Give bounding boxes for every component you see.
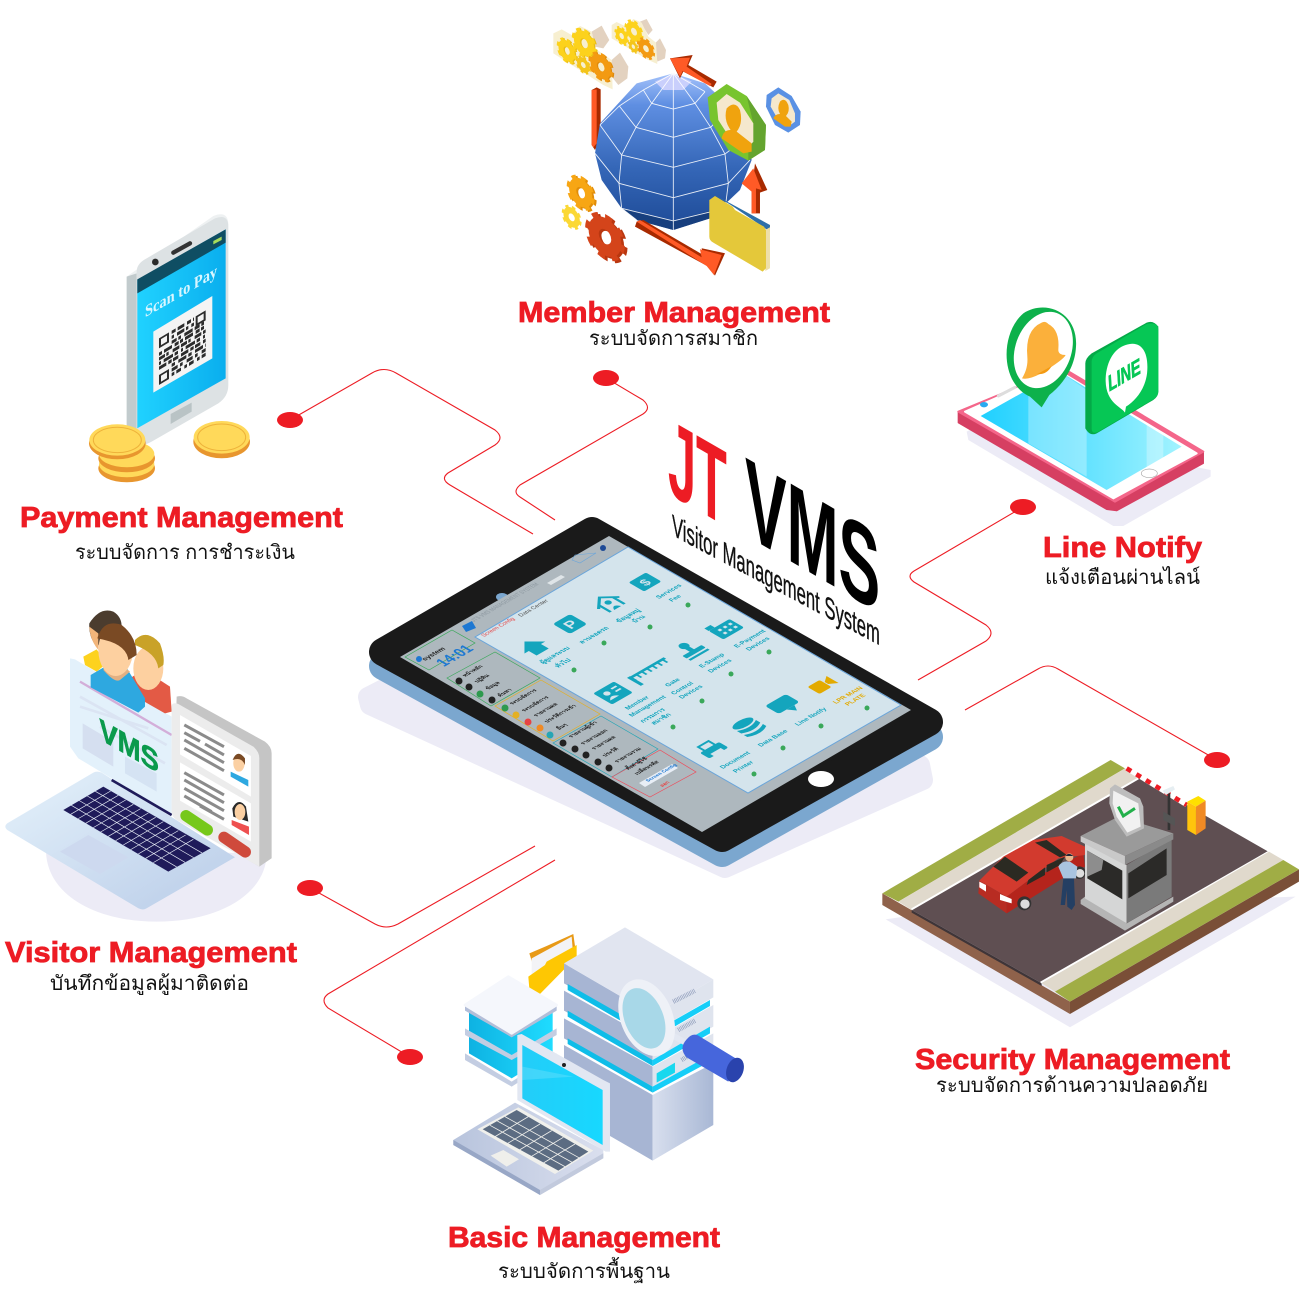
gear cloud left <box>553 25 628 89</box>
laptop <box>453 1034 610 1195</box>
dashboard labels: กรรมการ <box>639 707 668 724</box>
laptop base <box>5 772 235 909</box>
gear cloud right <box>612 17 666 64</box>
address bar: Screen Config <box>481 617 517 638</box>
heading: Payment Management <box>20 502 343 534</box>
parking icon: P <box>560 618 583 632</box>
touchpad <box>60 835 128 874</box>
light beams <box>1028 372 1163 477</box>
folder <box>709 195 770 272</box>
sand bottom <box>1042 852 1283 992</box>
address bar: JTS VMS MANAGEMENT SYSTEM <box>470 582 541 623</box>
sidebar text: ประวัติการเข้า <box>542 703 578 724</box>
icon: member management globe <box>553 17 801 276</box>
member badge small <box>766 87 801 133</box>
screen <box>400 536 911 832</box>
connector: payment <box>277 370 533 534</box>
label: visitor management <box>5 937 297 996</box>
connector: security <box>965 666 1230 768</box>
stamp icon <box>671 638 710 661</box>
heading: Line Notify <box>1043 532 1202 564</box>
phone top <box>958 368 1203 502</box>
tagline: Visitor Management System <box>672 509 880 652</box>
text lines <box>184 725 224 819</box>
green button <box>186 816 207 830</box>
shadow <box>46 850 267 922</box>
profile card <box>172 696 272 867</box>
dashboard labels: Data Base <box>757 729 790 748</box>
logo VMS: VMS <box>745 433 880 637</box>
phone screen <box>137 229 226 428</box>
subtitle: แจ้งเตือนผ่านไลน์ <box>1045 566 1200 589</box>
coin single <box>193 421 250 458</box>
tablet edge <box>383 545 929 853</box>
home icon <box>514 636 553 658</box>
main panel <box>475 547 901 793</box>
heading: Security Management <box>915 1044 1230 1076</box>
avatar man <box>231 754 248 787</box>
screen <box>981 372 1182 490</box>
front camera <box>980 402 988 407</box>
dashboard labels: Document <box>719 750 753 770</box>
dashboard labels: Member <box>624 695 652 711</box>
dashboard labels: Devices <box>745 636 772 652</box>
dashboard labels: E-Stamp <box>698 652 727 669</box>
sidebar text: รายงานผล <box>532 702 560 718</box>
label: line notify <box>1043 532 1202 589</box>
security guard <box>1058 853 1077 910</box>
battery <box>213 237 222 244</box>
dashboard labels: Management <box>628 694 669 718</box>
car <box>978 836 1086 913</box>
sidebar text: ระบบจัดการ <box>520 695 551 713</box>
dashboard labels: Devices <box>707 658 734 674</box>
dashboard labels: PLATE <box>844 693 868 707</box>
sidebar text: ค้นหา <box>495 687 514 698</box>
parking icon <box>553 614 587 634</box>
user icon <box>416 656 422 662</box>
heading: Basic Management <box>448 1222 720 1254</box>
terminal icon <box>704 616 744 640</box>
clock: 14:01 <box>433 643 478 669</box>
camera <box>152 259 159 265</box>
label: payment management <box>20 502 343 564</box>
barrier post <box>1187 796 1206 835</box>
logo: JT VMS <box>668 395 880 652</box>
sidebar text: อื่นๆ <box>553 722 569 731</box>
tablet shadow <box>368 678 923 868</box>
coin stack <box>89 424 155 482</box>
heading: Visitor Management <box>5 937 297 969</box>
connector: line notify <box>910 499 1036 680</box>
dashboard labels: Fee <box>668 594 684 603</box>
connector: basic <box>324 860 555 1065</box>
magnifier <box>608 971 747 1085</box>
dashboard labels: Services <box>655 583 684 600</box>
gate icon <box>628 657 677 685</box>
grass top <box>882 760 1125 902</box>
sidebar text: Screen Config <box>645 763 679 783</box>
shield <box>1109 784 1144 837</box>
dashboard labels: สมาชิก <box>649 712 673 726</box>
chat icon <box>765 694 806 718</box>
connector: member <box>516 370 648 520</box>
bottom gears <box>563 172 625 267</box>
qr code <box>153 296 212 393</box>
subtitle: ระบบจัดการพื้นฐาน <box>498 1257 670 1283</box>
icon: security gate <box>882 760 1299 1027</box>
camera pole <box>1163 786 1175 830</box>
dashboard labels: ข้อมูลหมู่ <box>613 607 643 625</box>
subtitle: ระบบจัดการสมาชิก <box>589 328 758 350</box>
printer icon <box>694 738 731 760</box>
globe body <box>595 73 752 230</box>
dashboard labels: บ้าน <box>629 613 648 624</box>
bell bubble <box>1004 303 1083 407</box>
icon: visitor management laptop <box>5 611 272 922</box>
dashboard labels: ลานจอดรถ <box>578 626 611 645</box>
grass bottom <box>1055 860 1299 1002</box>
dashboard labels: Control <box>670 681 696 696</box>
sidebar text: รายงานผู้เข้า <box>566 720 600 740</box>
panel top <box>180 715 251 797</box>
avatar woman <box>232 802 249 835</box>
laptop screen <box>70 658 172 817</box>
road lines <box>912 778 1269 983</box>
keyboard <box>63 787 211 872</box>
sidebar text: รายงานรวม <box>613 746 644 764</box>
label: member management <box>518 297 830 350</box>
line badge: LINE <box>1106 354 1143 396</box>
dashboard labels: Printer <box>732 760 756 774</box>
icon: payment phone <box>89 214 250 482</box>
small server <box>465 977 557 1087</box>
member icon <box>593 682 633 704</box>
sidebar text: ประวัติ <box>600 746 621 758</box>
speaker <box>173 243 190 253</box>
dashboard labels: Gate <box>664 677 683 688</box>
red button <box>224 837 245 852</box>
home button <box>171 403 192 424</box>
icon: line notify phone <box>958 303 1211 526</box>
config pill <box>639 764 678 787</box>
guard booth <box>1081 817 1173 931</box>
bezel <box>965 371 1197 498</box>
logo JT: JT <box>668 395 727 550</box>
dashboard labels: ทั่วไป <box>551 656 573 669</box>
dashboard labels: Devices <box>678 684 705 700</box>
house person icon <box>589 592 628 614</box>
phone shadow <box>967 423 1211 526</box>
globe bottom band <box>622 207 725 230</box>
icon: basic management servers <box>453 927 747 1195</box>
hinge <box>112 780 172 815</box>
dashboard labels <box>537 583 870 776</box>
phone side <box>958 368 1203 511</box>
left arrow bar <box>592 87 601 150</box>
globe grid <box>595 73 750 230</box>
label: basic management <box>448 1222 720 1283</box>
subtitle: ระบบจัดการ การชำระเงิน <box>75 542 295 564</box>
sidebar text: ออก <box>659 780 672 788</box>
folder <box>528 934 577 997</box>
speaker <box>998 387 1015 396</box>
line badge <box>1085 322 1158 434</box>
label: security management <box>915 1044 1230 1097</box>
shadow <box>886 897 1296 1027</box>
subtitle: บันทึกข้อมูลผู้มาติดต่อ <box>50 973 249 996</box>
home button <box>1141 469 1157 478</box>
dashboard labels: E-Payment <box>733 628 768 649</box>
sidebar text: ปฏิทิน <box>472 673 492 684</box>
globe cap <box>655 73 692 90</box>
phone body <box>127 214 228 444</box>
sidebar text: เปลี่ยนรหัส <box>632 759 661 776</box>
database icon <box>729 716 769 738</box>
screen panels <box>80 682 172 792</box>
fee icon: $ <box>635 576 655 588</box>
dashboard labels: Line Notify <box>794 707 829 727</box>
connector: visitor <box>297 846 535 927</box>
fee icon <box>629 572 661 592</box>
panel bottom <box>180 762 251 842</box>
dashboard icons <box>514 572 839 760</box>
dashboard labels: ผู้ดูแลระบบ <box>537 645 573 666</box>
sidebar text: รายงานออก <box>579 728 610 746</box>
sidebar text: รายงานผล <box>590 735 618 751</box>
sand top <box>898 768 1138 910</box>
server tower <box>564 927 713 1161</box>
address bar <box>462 545 606 638</box>
central tablet <box>368 531 929 868</box>
scan to pay text: Scan to Pay <box>145 260 218 321</box>
member badge large <box>708 84 766 161</box>
home button <box>808 771 834 787</box>
sidebar text <box>416 643 679 788</box>
status bar <box>137 229 226 293</box>
arrows <box>592 55 767 276</box>
road <box>912 777 1268 983</box>
vms text: VMS <box>99 713 159 780</box>
camera <box>496 593 508 601</box>
ground side <box>882 893 1070 1014</box>
subtitle: ระบบจัดการด้านความปลอดภัย <box>936 1075 1208 1097</box>
address bar: Data Center <box>518 599 550 618</box>
heading: Member Management <box>518 297 830 329</box>
sidebar text: ระบบจัดการ <box>508 688 539 706</box>
video icon <box>807 676 839 694</box>
sidebar icons <box>456 678 612 772</box>
barrier <box>1127 768 1187 805</box>
sidebar boxes <box>405 630 696 797</box>
dashboard labels: LPR MAIN <box>832 686 865 705</box>
system label: system <box>421 646 448 662</box>
sidebar text: ข้อมูล <box>483 680 503 692</box>
sidebar text: ตั้งค่าผู้ใช้ <box>622 755 650 772</box>
people <box>83 611 172 713</box>
sidebar text: หน้าหลัก <box>460 663 485 678</box>
tablet body <box>383 531 929 838</box>
